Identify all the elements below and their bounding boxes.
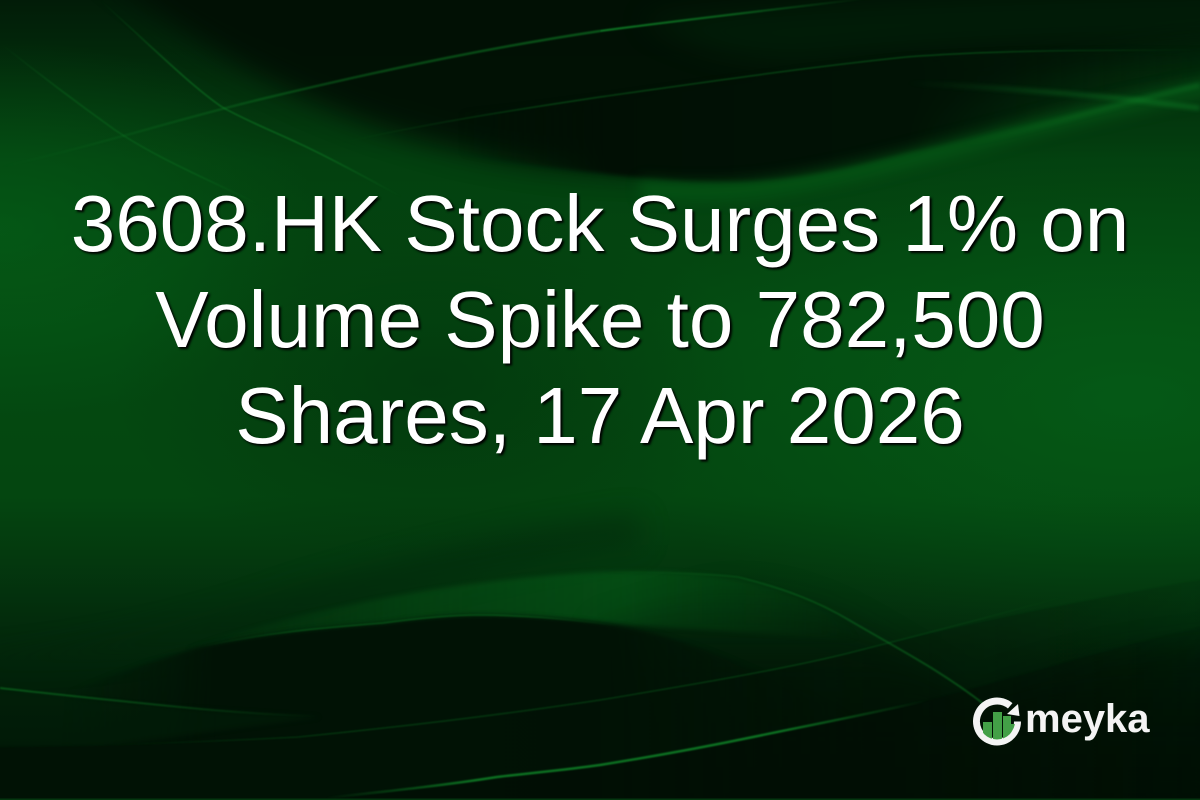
title: Volume Spike to 782,500 [155,275,1045,364]
logo: meyka [973,697,1150,746]
lower bright band [180,572,860,650]
title: Shares, 17 Apr 2026 [235,371,965,460]
lower hump [60,615,860,800]
upper lens [460,50,1200,182]
icon: circular arrow with bars [973,698,1021,746]
top dark mass [70,0,1200,172]
mid-left medium band [0,690,320,746]
title [71,179,1129,463]
glow band under lens [640,85,1200,191]
right soft dark swoosh [560,578,1200,800]
lighter strip at top right [640,0,1200,60]
bottom right dark wedge [325,620,1200,800]
lower dark band [0,575,1200,800]
soft dark above lower band [0,515,640,665]
wordmark: meyka [1025,697,1150,741]
title: 3608.HK Stock Surges 1% on [71,179,1129,268]
